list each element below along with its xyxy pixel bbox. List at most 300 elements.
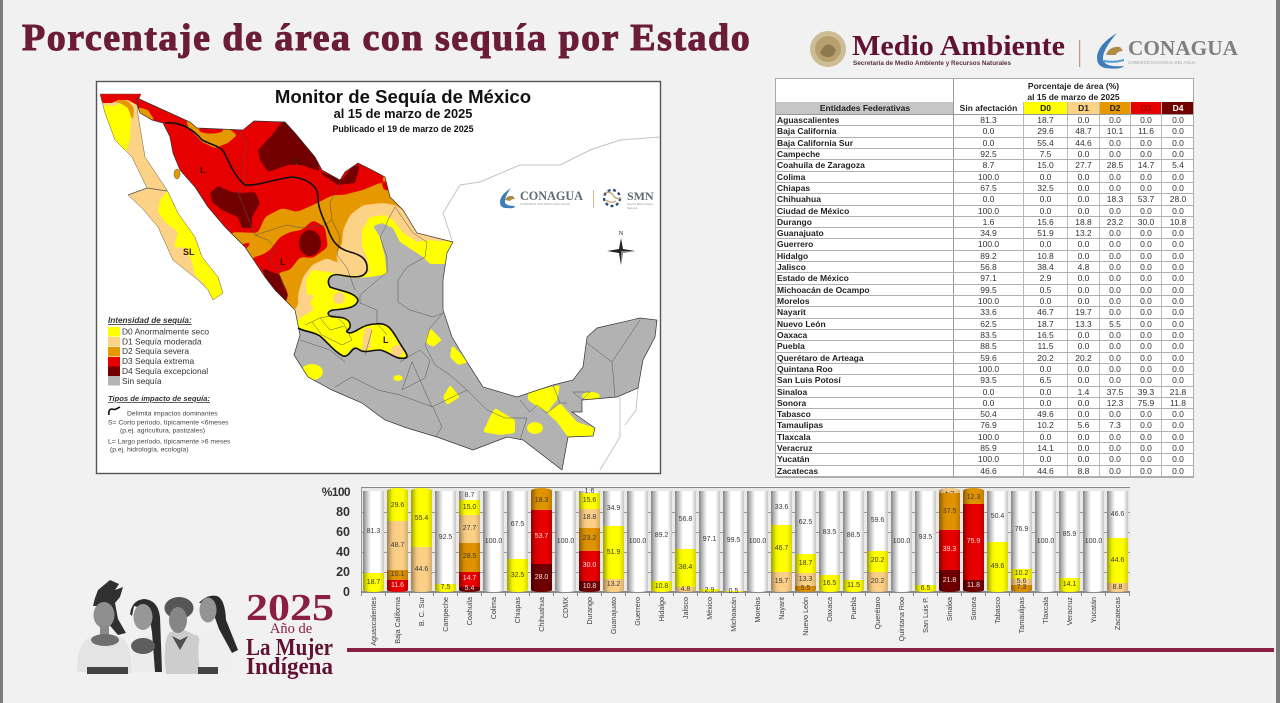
logo: 2025 Año de La Mujer Indígena: Indígena [246,654,333,680]
table rows: 18.7 [1037,115,1054,125]
table rows: 0.0 [1140,375,1152,385]
table rows: 0.0 [1109,149,1121,159]
table rows: 0.0 [1140,432,1152,442]
chart: stacked cylinders per state: 10.8 [583,583,596,590]
chart: stacked cylinders per state: 8.8 [1113,584,1122,591]
legend: drought impact types: (p.ej. agricultura, pastizales) [120,428,205,434]
text: Baja California [393,597,402,644]
D4 exceptional drought areas [210,118,360,305]
chart: stacked cylinders per state: 33.6 [775,504,788,511]
table rows: 18.7 [1037,319,1054,329]
chart: stacked cylinders per state: 15.6 [583,497,596,504]
text: Guanajuato [609,597,618,634]
table rows: 0.0 [1140,115,1152,125]
logo: 2025 Año de La Mujer Indígena: La Mujer [246,635,333,661]
table rows: Quintana Roo [777,364,833,374]
table rows: Ciudad de México [777,206,849,216]
table rows: 0.0 [1172,206,1184,216]
table rows: 15.0 [1037,160,1054,170]
table heading: Porcentaje de área (%) [1028,81,1119,91]
chart: stacked cylinders per state: 50.4 [991,513,1004,520]
table rows: 0.0 [1140,454,1152,464]
chart: stacked cylinders per state: 44.6 [415,566,428,573]
table rows: Sinaloa [777,386,807,396]
table rows: 100.0 [978,432,999,442]
map logos: CONAGUA and SMN: Servicio Meteorológico [627,202,654,206]
text: Veracruz [1065,597,1074,625]
map title: Monitor de Sequía de México [275,86,531,107]
map labels: SL and L impact types: SL [183,247,195,257]
table rows: 0.0 [1078,364,1089,374]
chart: y axis labels: 20 [336,565,350,579]
table rows: 0.0 [1040,454,1051,464]
table rows: 83.5 [980,330,997,340]
table rows: 2.9 [1040,273,1051,283]
map: Baja California peninsula [100,94,224,300]
chart: stacked cylinders per state: 100.0 [1085,538,1102,545]
legend: drought impact types: S= Corto período, típicamente <6meses [108,420,229,426]
table rows: 0.0 [1172,183,1184,193]
table rows: 11.6 [1138,126,1154,136]
table rows: 1.6 [983,217,994,227]
table rows: Baja California [777,126,837,136]
chart: stacked cylinders per state: 59.6 [871,517,884,524]
legend: drought intensity: D1 Sequía moderada [122,336,202,346]
table rows: 0.0 [1172,443,1184,453]
table rows: San Luis Potosí [777,375,841,385]
table rows: 0.0 [1172,239,1184,249]
D0 southern patches [301,328,600,438]
chart: stacked cylinders per state: 0.5 [729,588,738,595]
chart: stacked cylinders per state: 14.7 [463,575,476,582]
table rows: 14.7 [1138,160,1154,170]
text: Sonora [969,597,978,620]
table rows: 0.0 [1109,296,1121,306]
text: Tamaulipas [1017,597,1026,633]
table rows: 1.4 [1078,386,1089,396]
chart: stacked cylinders per state: 18.3 [535,497,548,504]
chart: stacked cylinders per state: 49.6 [991,563,1004,570]
table column headers: D4 [1173,103,1183,113]
map: mainland outline [137,98,657,470]
table rows: 38.4 [1037,262,1054,272]
chart: stacked cylinders per state: 10.1 [391,571,404,578]
table rows: Guerrero [777,239,813,249]
map logos: CONAGUA and SMN [500,188,654,210]
D2 patches over north Sonora [138,107,237,148]
table rows: 4.8 [1078,262,1089,272]
map labels: SL and L impact types: SL [291,157,303,167]
table rows: 67.5 [980,183,997,193]
chart: stacked cylinders per state: 18.8 [583,514,596,521]
chart: plot background and grid [361,487,1130,592]
table rows: Sonora [777,398,806,408]
table rows: 0.0 [1109,172,1121,182]
map title: Publicado el 19 de marzo de 2025 [332,124,474,134]
table rows: 0.0 [1172,341,1184,351]
table rows: 0.0 [1140,307,1152,317]
table rows [776,115,1193,477]
chart: stacked cylinders per state: 32.5 [511,572,524,579]
chart: stacked cylinders per state: 88.5 [847,532,860,539]
table rows: 75.9 [1138,398,1154,408]
table rows: Zacatecas [777,466,818,476]
map title [275,86,531,134]
table rows: 0.0 [1140,138,1152,148]
chart: stacked cylinders per state: 81.3 [367,528,380,535]
table rows: 29.6 [1037,126,1054,136]
table rows: Chiapas [777,183,810,193]
table rows: 51.9 [1037,228,1054,238]
table rows: 0.0 [1078,296,1089,306]
chart: stacked cylinders per state: 44.6 [1111,557,1124,564]
table rows: 0.0 [1040,386,1051,396]
map: surrounding coastlines [443,137,660,470]
logo text: CONAGUA: CONAGUA [1128,36,1239,60]
table rows: 97.1 [980,273,997,283]
footer rule [347,648,1274,652]
table rows: 0.0 [1078,206,1089,216]
panel: drought map [96,80,662,474]
table rows: 13.3 [1075,319,1092,329]
chart: stacked cylinders per state: 100.0 [629,538,646,545]
chart: stacked cylinders per state: 46.7 [775,545,788,552]
table rows: 59.6 [980,353,997,363]
table column headers: D3 [1141,103,1151,113]
table rows: 10.2 [1037,420,1054,430]
table rows: Nuevo León [777,319,826,329]
table rows: Morelos [777,296,810,306]
table rows: 50.4 [980,409,997,419]
table rows: 0.0 [1140,273,1152,283]
text: Chihuahua [537,597,546,632]
text: Campeche [441,597,450,632]
table rows: 44.6 [1037,466,1054,476]
map logos: CONAGUA and SMN: Nacional [627,206,638,210]
chart: stacked cylinders per state: 5.5 [801,585,810,592]
logo: 2025 Año de La Mujer Indígena [246,587,334,680]
table rows: 37.5 [1107,386,1123,396]
chart: stacked cylinders per state: 14.1 [1063,581,1076,588]
text: Sinaloa [945,597,954,621]
legend: drought intensity: Intensidad de sequía: [108,316,192,325]
table column headers: D1 [1078,103,1089,113]
table column headers: D0 [1040,103,1051,113]
table rows: 0.0 [1078,115,1089,125]
text: Tlaxcala [1041,597,1050,624]
legend: drought intensity: D3 Sequía extrema [122,356,194,366]
text: Morelos [753,597,762,622]
table rows: Coahuila de Zaragoza [777,160,865,170]
table rows: 0.0 [1109,183,1121,193]
legend: drought intensity [108,316,209,386]
table rows: 0.0 [1078,149,1089,159]
chart: stacked cylinders per state: 5.4 [465,585,474,592]
chart: stacked cylinders per state: 1.4 [945,488,954,495]
table rows: 0.0 [1109,206,1121,216]
table rows: 0.0 [1040,194,1051,204]
table rows: Estado de México [777,273,849,283]
woman 3 [164,597,204,674]
table rows: 0.0 [1172,466,1184,476]
chart: stacked cylinders per state: 46.6 [1111,511,1124,518]
table rows: 0.0 [1109,228,1121,238]
table rows: 0.0 [1078,375,1089,385]
text: B. C. Sur [417,597,426,626]
text: Chiapas [513,597,522,623]
chart: stacked cylinders per state: 4.8 [681,586,690,593]
text: Coahuila [465,597,474,625]
table rows: 99.5 [980,285,997,295]
chart: stacked cylinders per state: 92.5 [439,534,452,541]
table rows: 0.0 [1109,341,1121,351]
map labels: SL and L impact types: L [383,335,389,345]
table rows: 0.0 [1172,353,1184,363]
table rows: 0.0 [1109,115,1121,125]
chart: stacked cylinders per state: 2.9 [705,587,714,594]
table rows: 28.5 [1107,160,1123,170]
chart: stacked cylinders per state: 100.0 [749,538,766,545]
chart: stacked cylinders per state: 39.3 [943,546,956,553]
chart: stacked cylinders per state: 75.9 [967,538,980,545]
window edge: right [1276,0,1280,703]
icon: north arrow: N [619,230,624,237]
table rows: 0.0 [1078,183,1089,193]
table rows: 0.0 [1172,319,1184,329]
map: island [174,169,180,179]
logo: Medio Ambiente seal [810,31,846,67]
chart: stacked cylinders per state: 29.6 [391,502,404,509]
table rows: 20.2 [1037,353,1054,363]
table rows: Durango [777,217,812,227]
table rows: 0.0 [1172,375,1184,385]
chart: stacked cylinders per state: 15.0 [463,504,476,511]
table rows: 0.0 [1140,466,1152,476]
table rows: 0.0 [983,398,994,408]
table rows: 0.0 [1078,432,1089,442]
table rows: 30.0 [1138,217,1154,227]
table rows: 89.2 [980,251,997,261]
chart: stacked cylinders per state: 85.9 [1063,531,1076,538]
table rows: 100.0 [978,454,999,464]
legend: drought impact types: L= Largo período, típicamente >6 meses [108,438,231,446]
chart: stacked cylinders per state: 7.5 [441,584,450,591]
table rows: Tamaulipas [777,420,823,430]
chart: baseline [361,591,1130,593]
table rows: Querétaro de Arteaga [777,353,864,363]
table rows: 0.0 [1172,432,1184,442]
table rows: 44.6 [1075,138,1092,148]
table rows: 15.6 [1037,217,1054,227]
table rows: 11.5 [1038,341,1053,351]
table rows: 0.0 [1109,432,1121,442]
text: Michoacán [729,597,738,632]
text: Tabasco [993,597,1002,624]
table rows: 8.8 [1078,466,1089,476]
table rows: 0.0 [1140,285,1152,295]
table rows: 0.0 [1109,466,1121,476]
chart: stacked cylinders per state: 27.7 [463,525,476,532]
chart: stacked cylinders per state: 6.5 [921,585,930,592]
chart: stacked cylinders per state: 10.8 [655,583,668,590]
chart: stacked cylinders per state: 100.0 [485,538,502,545]
table rows: 0.0 [1140,296,1152,306]
map labels: SL and L impact types: L [280,257,286,267]
text: Jalisco [681,597,690,619]
table rows: Chihuahua [777,194,821,204]
text: Quintana Roo [897,597,906,641]
chart: stacked cylinders per state: 76.9 [1015,526,1028,533]
legend: drought intensity: D2 Sequía severa [122,346,189,356]
illustration: four indigenous women [77,580,238,674]
chart: stacked cylinders per state: 38.4 [679,564,692,571]
logo text: CONAGUA: COMISIÓN NACIONAL DEL AGUA [1128,59,1196,65]
text: San Luis P. [921,597,930,633]
chart: stacked cylinders per state: 11.6 [391,582,404,589]
table rows: 23.2 [1107,217,1123,227]
table rows: 32.5 [1037,183,1054,193]
table rows: Hidalgo [777,251,808,261]
table rows: 0.0 [1109,239,1121,249]
table rows: 0.0 [1172,262,1184,272]
chart: stacked cylinders per state: 16.5 [823,580,836,587]
chart: y axis labels: 60 [336,525,350,539]
text: Hidalgo [657,597,666,621]
table rows: 0.0 [1172,172,1184,182]
table rows: 0.0 [1172,285,1184,295]
legend: drought impact types: (p.ej. hidrología, ecología) [110,446,189,454]
map logos: CONAGUA and SMN: CONAGUA [520,189,583,203]
table heading [953,79,1120,102]
table rows: 0.0 [1140,353,1152,363]
logo text: Medio Ambiente: Medio Ambiente [852,31,1065,62]
table rows: 6.5 [1040,375,1051,385]
table rows: Oaxaca [777,330,807,340]
chart: stacked cylinders per state: 100.0 [557,538,574,545]
table rows: 0.0 [1078,239,1089,249]
table rows: 10.8 [1037,251,1054,261]
table rows: 0.0 [1140,183,1152,193]
table rows: 0.0 [1172,364,1184,374]
map: mainland drought intensity [137,99,656,470]
table rows: 0.0 [1172,420,1184,430]
window edge: left [0,0,3,703]
table rows: 0.0 [1140,251,1152,261]
table rows: 0.0 [1172,330,1184,340]
icon: north arrow [607,230,635,265]
table rows: 55.4 [1037,138,1054,148]
table rows: 0.0 [1040,206,1051,216]
chart: y axis labels: 80 [336,505,350,519]
chart: stacked cylinders per state: 7.3 [1017,584,1026,591]
table rows: 28.0 [1170,194,1186,204]
table rows: 0.0 [1040,432,1051,442]
chart: stacked cylinders per state: 11.8 [967,582,980,589]
chart: stacked cylinders per state: 67.5 [511,521,524,528]
chart: stacked cylinders per state: 20.2 [871,557,884,564]
text: Nayarit [777,597,786,620]
table rows: 21.8 [1170,386,1186,396]
table rows: 46.6 [980,466,997,476]
table rows: 0.0 [1109,262,1121,272]
legend: drought intensity: D4 Sequía excepcional [122,366,208,376]
table rows: 0.0 [983,194,994,204]
table rows: 10.8 [1170,217,1186,227]
text: Guerrero [633,597,642,626]
table rows: 100.0 [978,364,999,374]
table rows: 0.0 [1140,239,1152,249]
table rows: 0.0 [1040,239,1051,249]
table rows: 100.0 [978,296,999,306]
table rows: 0.0 [1078,443,1089,453]
map: dominant impact boundary line [165,123,407,358]
table column headers: D2 [1110,103,1120,113]
chart: stacked cylinders per state: 55.4 [415,515,428,522]
chart: axis ticks [361,593,1131,596]
text: Zacatecas [1113,597,1122,630]
chart: stacked cylinders per state: 5.6 [1017,578,1026,585]
chart: stacked cylinders per state: 20.2 [871,578,884,585]
table rows: 0.0 [1140,420,1152,430]
D2 severe drought area [232,176,404,309]
chart: stacked cylinders per state: 18.7 [799,560,812,567]
logo: 2025 Año de La Mujer Indígena: 2025 [246,587,334,629]
table rows: 0.0 [1078,409,1089,419]
table rows: 0.0 [1078,194,1089,204]
chart: stacked cylinders per state: 97.1 [703,536,716,543]
table rows: 0.0 [1172,296,1184,306]
D1 moderate drought area [294,203,446,357]
chart: stacked cylinders per state: 93.5 [919,534,932,541]
table rows: 5.6 [1078,420,1089,430]
chart: stacked cylinders per state: 11.5 [847,582,860,589]
chart: stacked cylinders per state: 89.2 [655,532,668,539]
chart: stacked cylinders per state: 30.0 [583,562,596,569]
table rows: 0.0 [1140,341,1152,351]
table rows: 0.0 [1140,330,1152,340]
chart: stacked cylinders per state: 100.0 [1037,538,1054,545]
table rows: 0.0 [1078,172,1089,182]
table rows: 16.5 [1037,330,1054,340]
table rows: 100.0 [978,206,999,216]
table rows: 0.0 [1109,364,1121,374]
table rows: 88.5 [980,341,997,351]
table rows: 0.0 [1172,251,1184,261]
table rows: 0.0 [1078,454,1089,464]
chart: stacked cylinders per state: 53.7 [535,533,548,540]
table rows: 0.0 [983,126,994,136]
table rows: 0.0 [1040,296,1051,306]
table rows: 8.7 [983,160,994,170]
D3 spot in north Sonora [199,128,223,134]
chart: stacked cylinders per state: 1.6 [585,488,594,495]
table rows: Guanajuato [777,228,824,238]
text: Puebla [849,597,858,619]
table rows: 10.1 [1107,126,1123,136]
D0 abnormally dry area [298,215,453,358]
legend: drought impact types: Delimita impactos dominantes [127,410,218,418]
table rows: 0.0 [1109,330,1121,340]
table rows: 7.3 [1109,420,1121,430]
logo divider [1079,40,1080,67]
table rows: 12.3 [1107,398,1123,408]
table rows: 0.0 [1040,398,1051,408]
table rows: 81.3 [980,115,997,125]
text: CDMX [561,597,570,618]
table rows: 56.8 [980,262,997,272]
table rows: 62.5 [980,319,997,329]
table rows: 0.0 [1109,138,1121,148]
